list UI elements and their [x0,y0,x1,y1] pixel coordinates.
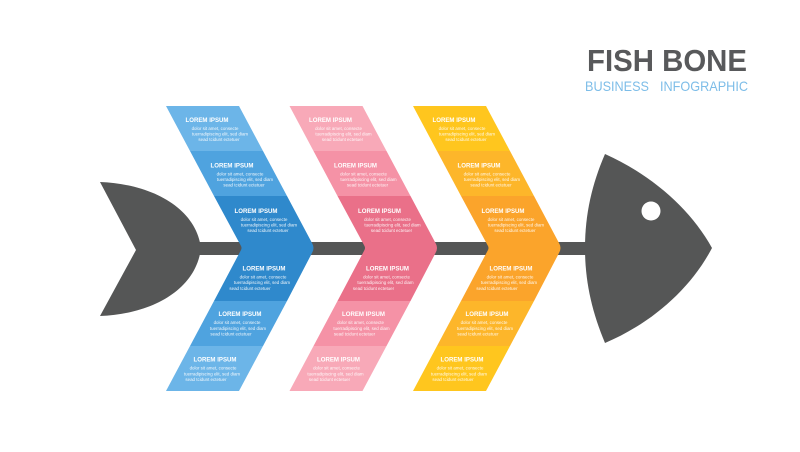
text: pink row 6: tuerradipiscing elit, sed diam [307,372,364,376]
text: pink row 3: sead tcidunt ectetuer [371,228,413,233]
text: pink row 3: tuerradipiscing elit, sed diam [364,222,421,228]
text: pink row 4: dolor sit amet, consecte [363,274,410,280]
band: yellow row 5 [437,301,534,346]
text: blue row 3: dolor sit amet, consecte [241,217,288,222]
text: blue row 2: LOREM IPSUM [210,162,254,170]
subtitle [585,78,748,94]
text: pink row 4 [353,266,414,291]
subtitle: INFOGRAPHIC [660,78,748,94]
text: yellow row 6: sead tcidunt ectetuer [432,377,474,382]
band: yellow row 6 [413,346,510,391]
text: yellow row 2: sead tcidunt ectetuer [470,182,512,188]
text: blue row 3: sead tcidunt ectetuer [247,228,289,233]
band: yellow row 2 [437,151,534,196]
text: pink row 4: tuerradipiscing elit, sed diam [357,280,414,285]
text: blue row 1: sead tcidunt ectetuer [198,137,240,142]
band: pink row 5 [314,301,410,346]
text: pink row 3: dolor sit amet, consecte [364,217,411,222]
text: blue row 4 [229,266,290,291]
text: pink row 5: LOREM IPSUM [342,311,385,318]
text: pink row 4: sead tcidunt ectetuer [353,286,395,291]
text: yellow row 1: sead tcidunt ectetuer [445,137,487,142]
text: pink row 1: tuerradipiscing elit, sed diam [315,132,372,136]
text: blue row 5: sead tcidunt ectetuer [210,332,252,336]
text: blue row 4: tuerradipiscing elit, sed diam [234,280,290,285]
text: yellow row 4: dolor sit amet, consecte [487,274,534,280]
text: pink row 1: sead tcidunt ectetuer [322,137,364,142]
text: blue row 2: sead tcidunt ectetuer [223,182,265,188]
text: yellow row 5: dolor sit amet, consecte [461,320,508,325]
text: pink row 5 [333,311,390,336]
spine [195,242,590,255]
text: blue row 5 [210,311,266,336]
text: blue row 3: LOREM IPSUM [234,208,278,215]
text: yellow row 4: LOREM IPSUM [490,266,532,272]
fish tail [100,182,201,316]
text: blue row 1: LOREM IPSUM [186,117,228,124]
text: yellow row 3: dolor sit amet, consecte [488,217,535,222]
text: pink row 5: tuerradipiscing elit, sed diam [333,326,390,331]
text: pink row 6: dolor sit amet, consecte [313,366,360,370]
text: yellow row 5: sead tcidunt ectetuer [457,332,499,336]
text: blue row 2: tuerradipiscing elit, sed diam [217,177,273,182]
text: pink row 2: LOREM IPSUM [334,162,377,170]
text: pink row 6: sead tcidunt ectetuer [309,377,351,382]
text: blue row 6: dolor sit amet, consecte [190,366,237,370]
text: yellow row 4 [476,266,537,291]
text: pink row 2: tuerradipiscing elit, sed diam [340,177,397,182]
text: yellow row 1: tuerradipiscing elit, sed diam [439,132,495,136]
text: yellow row 1: dolor sit amet, consecte [439,126,486,131]
text: blue row 1 [186,117,248,142]
fish head [585,154,712,343]
text: pink row 5: dolor sit amet, consecte [337,320,384,325]
text: blue row 2: dolor sit amet, consecte [217,172,264,176]
text: yellow row 5: tuerradipiscing elit, sed diam [457,326,513,331]
text: yellow row 6: LOREM IPSUM [440,356,484,364]
text: yellow row 6: tuerradipiscing elit, sed diam [431,372,487,376]
band: pink row 1 [290,106,386,151]
text: yellow row 3: LOREM IPSUM [482,208,524,215]
text: yellow row 1 [432,117,495,142]
text: blue row 5: LOREM IPSUM [218,311,262,318]
text: yellow row 1: LOREM IPSUM [432,117,476,124]
text: yellow row 5: LOREM IPSUM [466,311,508,318]
band: pink row 2 [314,151,410,196]
text: yellow row 4: tuerradipiscing elit, sed diam [481,280,537,285]
band: pink row 6 [290,346,386,391]
text: pink row 2: sead tcidunt ectetuer [347,182,389,188]
text: yellow row 5 [457,311,513,336]
subtitle: BUSINESS [585,78,649,94]
text: pink row 4: LOREM IPSUM [366,266,409,272]
panel: pink chevron [290,106,437,391]
text: yellow row 2: LOREM IPSUM [458,162,500,170]
text: blue row 4: dolor sit amet, consecte [240,274,287,280]
text: yellow row 2: tuerradipiscing elit, sed diam [464,177,520,182]
text: blue row 5: tuerradipiscing elit, sed diam [210,326,266,331]
text: yellow row 2: dolor sit amet, consecte [464,172,511,176]
text: blue row 2 [210,162,273,188]
text: blue row 6: LOREM IPSUM [194,356,236,364]
text: blue row 1: tuerradipiscing elit, sed diam [192,132,248,136]
text: yellow row 4: sead tcidunt ectetuer [476,286,518,291]
band: blue row 1 [166,106,263,151]
text: blue row 5: dolor sit amet, consecte [214,320,261,325]
text: blue row 4: LOREM IPSUM [242,266,286,272]
text: yellow row 3: sead tcidunt ectetuer [494,228,536,233]
text: pink row 1: dolor sit amet, consecte [315,126,362,131]
title: FISH BONE [587,43,747,78]
band: yellow row 3 and 4 [461,196,560,301]
band: blue row 2 [190,151,287,196]
band: yellow row 1 [413,106,510,151]
text: blue row 1: dolor sit amet, consecte [192,126,239,131]
band: blue row 5 [190,301,287,346]
band: pink row 3 and 4 [338,196,437,301]
panel: yellow chevron [413,106,560,391]
text: pink row 3: LOREM IPSUM [358,208,401,215]
text: pink row 5: sead tcidunt ectetuer [334,332,376,336]
text: blue row 3: tuerradipiscing elit, sed diam [241,222,297,228]
text: pink row 2: dolor sit amet, consecte [340,172,387,176]
text: blue row 3 [234,208,297,233]
text: pink row 6 [307,356,364,382]
text: blue row 6 [184,356,240,382]
text: pink row 6: LOREM IPSUM [317,356,360,364]
text: yellow row 3: tuerradipiscing elit, sed diam [488,222,544,228]
band: blue row 6 [166,346,263,391]
text: pink row 3 [358,208,421,233]
text: pink row 2 [334,162,397,188]
text: pink row 1: LOREM IPSUM [309,117,352,124]
icon: fish eye [642,202,660,220]
text: yellow row 6: dolor sit amet, consecte [437,366,484,370]
text: pink row 1 [309,117,372,142]
panel: blue chevron [166,106,314,391]
text: blue row 6: sead tcidunt ectetuer [185,377,227,382]
text: yellow row 6 [431,356,487,382]
text: blue row 4: sead tcidunt ectetuer [229,286,271,291]
band: blue row 3 and 4 [214,196,314,301]
text: blue row 6: tuerradipiscing elit, sed diam [184,372,240,376]
text: yellow row 2 [458,162,520,188]
text: yellow row 3 [482,208,544,233]
